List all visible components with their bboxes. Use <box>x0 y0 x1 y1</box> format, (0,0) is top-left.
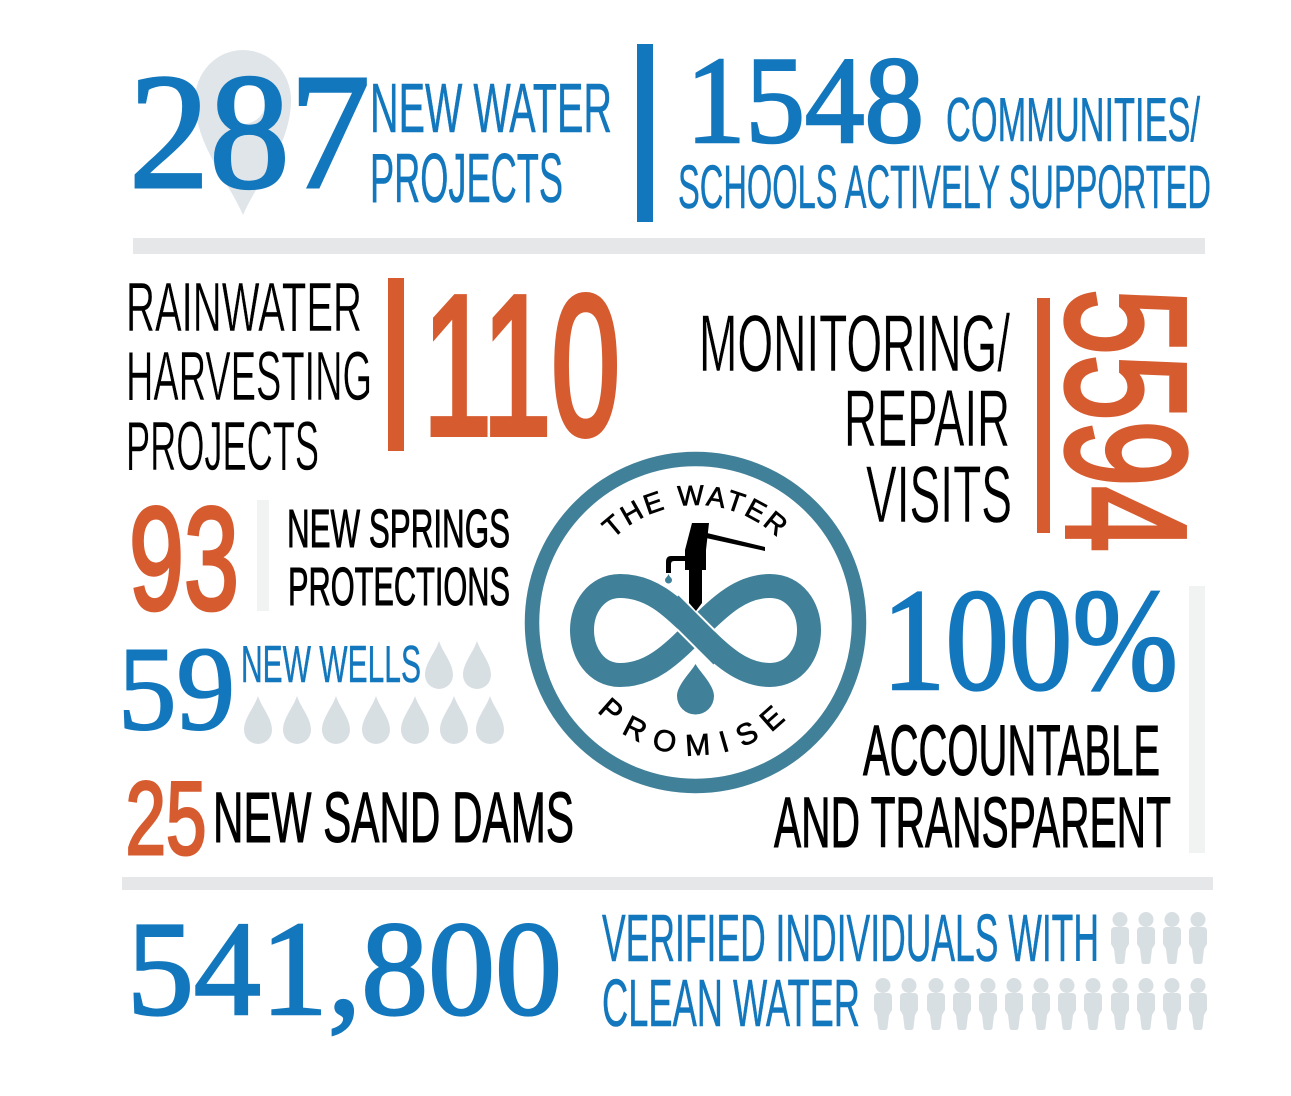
label: new springs protections: NEW SPRINGS <box>287 499 510 559</box>
stat: 100% accountable and transparent <box>774 559 1205 863</box>
stat: rainwater harvesting projects: HARVESTING <box>126 337 372 415</box>
icons: people <box>874 912 1207 1030</box>
stat: 287 new water projects <box>129 40 612 223</box>
logo text: the water: THE WATER <box>600 485 786 537</box>
stat: 93 new springs protections: 93 <box>129 477 239 640</box>
label: new water projects: PROJECTS <box>370 139 563 217</box>
stat: monitoring and repair visits: VISITS <box>866 450 1012 540</box>
stat: monitoring and repair visits: REPAIR <box>844 374 1010 464</box>
light gray bar <box>257 500 269 611</box>
label: verified individuals with clean water: CLEAN WATER <box>602 966 860 1041</box>
label: new springs protections: PROTECTIONS <box>288 557 510 617</box>
icon: hand pump <box>666 523 765 611</box>
stat: 1548 communities and schools: 1548 <box>686 32 924 169</box>
infinity symbol <box>582 586 809 675</box>
logo ring <box>532 459 859 786</box>
stat: 93 new springs protections <box>129 477 510 640</box>
stat: monitoring and repair visits: MONITORING/ <box>699 299 1010 389</box>
stat: 25 new sand dams: 25 <box>126 761 206 877</box>
icon: large drop <box>677 664 714 715</box>
stat: 1548 communities and schools <box>678 32 1211 221</box>
orange bar <box>1037 298 1050 533</box>
stat: 541,800 verified individuals: 541,800 <box>127 895 562 1044</box>
divider: top gray band <box>133 238 1205 254</box>
icon: small drop <box>665 574 672 584</box>
stat: monitoring and repair visits <box>699 289 1220 552</box>
stat: 100% accountable and transparent: 100% <box>882 559 1178 721</box>
label: communities and schools actively supported <box>678 86 1211 221</box>
label: new springs protections <box>287 499 510 617</box>
label: new water projects: NEW WATER <box>370 69 612 147</box>
stat: 287 new water projects: 287 <box>129 40 370 223</box>
label: accountable and transparent <box>774 712 1171 863</box>
label: new water projects <box>370 69 612 217</box>
divider: bottom gray band <box>122 877 1213 890</box>
icons: water drops <box>244 641 504 744</box>
divider: blue vertical bar <box>637 44 653 222</box>
logo: The Water Promise <box>524 452 866 794</box>
label: verified individuals with clean water <box>602 901 1099 1041</box>
icon: map pin <box>195 50 291 215</box>
stat: rainwater harvesting projects: PROJECTS <box>126 407 319 485</box>
stat: 25 new sand dams <box>126 761 574 877</box>
light gray bar <box>1189 586 1205 853</box>
stat: rainwater harvesting projects <box>126 255 620 485</box>
stat: 541,800 verified individuals <box>127 895 1207 1044</box>
logo text: promise: PROMISE <box>598 697 786 756</box>
number: 5594 rotated: 5594 <box>1030 289 1220 552</box>
stat: 59 new wells: 59 <box>118 622 235 755</box>
stat: 59 new wells <box>118 622 504 755</box>
stat: rainwater harvesting projects: RAINWATER <box>126 268 362 346</box>
label: new sand dams: NEW SAND DAMS <box>213 779 574 858</box>
label: new wells: NEW WELLS <box>241 636 421 694</box>
orange bar <box>388 278 404 451</box>
number: 110: 110 <box>423 255 620 477</box>
